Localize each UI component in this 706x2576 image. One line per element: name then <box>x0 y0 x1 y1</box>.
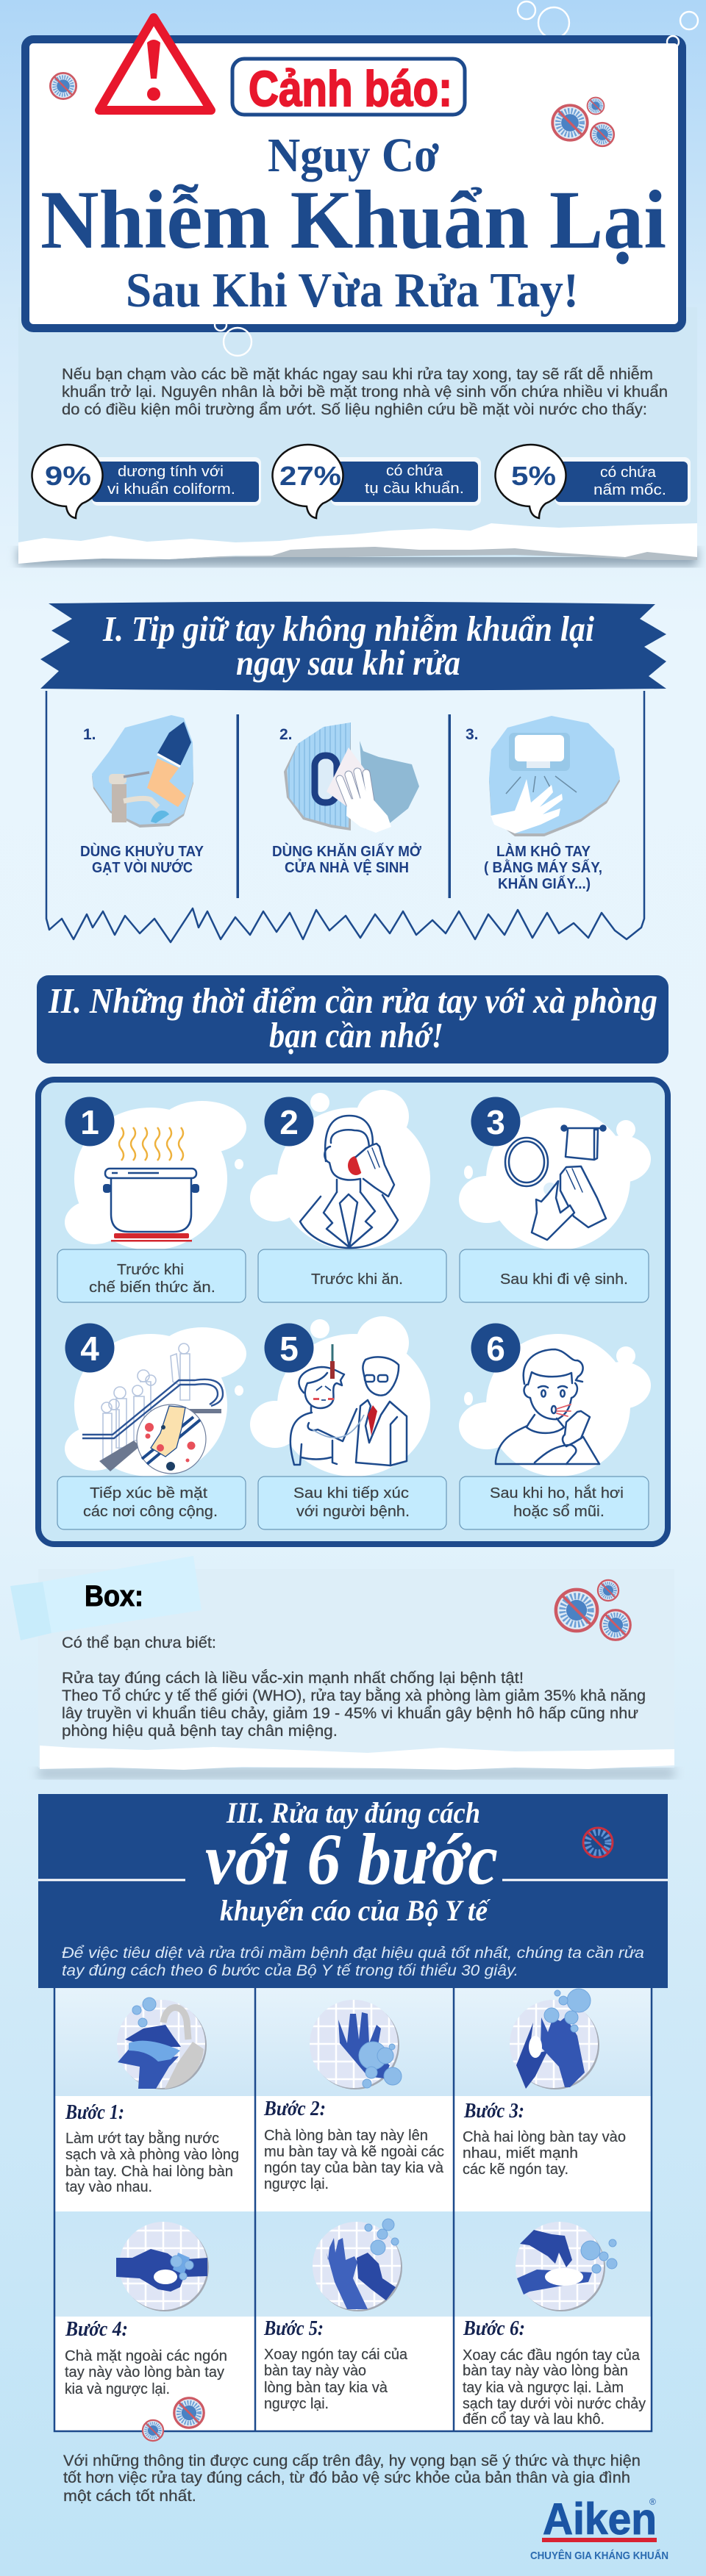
step 2 illustration <box>307 1997 402 2091</box>
stat: 5%: nấm mốc. <box>593 482 666 498</box>
number 3 <box>471 1097 521 1147</box>
step 2 text: ngược lại. <box>264 2176 329 2192</box>
caption box 2 <box>258 1249 446 1302</box>
caption box 6: Sau khi ho, hắt hơi <box>490 1485 624 1502</box>
moment 1: cloud <box>65 1101 246 1250</box>
tip 1: 1. <box>83 726 96 743</box>
intro text <box>62 366 668 418</box>
main title: Sau Khi Vừa Rửa Tay! <box>126 263 579 317</box>
step 2 text: mu bàn tay và kẽ ngoài các <box>264 2144 444 2160</box>
section II banner <box>37 975 668 1063</box>
step 5 text: Bước 5: <box>263 2317 324 2340</box>
moment 4: cloud <box>65 1327 246 1477</box>
section III header: III. Rửa tay đúng cách <box>226 1796 480 1829</box>
section II banner: bạn cần nhớ! <box>269 1015 443 1055</box>
step 5 <box>263 2219 408 2412</box>
step 6 text: Bước 6: <box>463 2317 525 2340</box>
virus icon left <box>50 73 76 99</box>
icon: escalator and germs <box>82 1343 223 1474</box>
tip 1 <box>80 715 204 876</box>
step 2 text: Bước 2: <box>263 2098 326 2120</box>
step 6 text: Xoay các đầu ngón tay của <box>463 2347 641 2364</box>
tip 2 <box>272 722 422 876</box>
step 6 text: đến cổ tay và lau khô. <box>463 2411 605 2428</box>
stat: 9%: 9% <box>45 461 91 491</box>
tape label: Box: <box>85 1580 143 1612</box>
caption 2: CỬA NHÀ VỆ SINH <box>285 858 409 876</box>
intro text: Nếu bạn chạm vào các bề mặt khác ngay sau khi rửa tay xong, tay sẽ rất dễ nhiễm <box>62 366 653 383</box>
virus cluster right <box>552 98 614 146</box>
warning triangle icon <box>99 18 211 110</box>
step 4 text: tay này vào lòng bàn tay <box>65 2364 224 2381</box>
stat: 5%: có chứa <box>600 464 657 481</box>
main title <box>40 129 666 317</box>
step 6 <box>463 2219 646 2428</box>
step 5 text: lòng bàn tay kia và <box>264 2380 388 2396</box>
step 6 text: bàn tay này vào lòng bàn <box>463 2363 628 2379</box>
stat: 9% <box>32 445 261 518</box>
moment 5: cloud <box>250 1316 430 1477</box>
step 3 <box>463 1989 626 2178</box>
caption 1 <box>80 842 204 876</box>
stat: 27% <box>273 445 481 518</box>
tip 2: 2. <box>279 726 293 743</box>
step 4 text: Chà mặt ngoài các ngón <box>65 2348 227 2364</box>
caption box 4 <box>57 1477 246 1529</box>
moment 3: cloud <box>459 1108 651 1250</box>
caption box 2: Trước khi ăn. <box>311 1271 403 1288</box>
caption box 3: Sau khi đi vệ sinh. <box>500 1271 628 1288</box>
caption box 5: với người bệnh. <box>296 1504 410 1520</box>
number 5: 5 <box>279 1330 299 1368</box>
closing text: Với những thông tin được cung cấp trên đây, hy vọng bạn sẽ ý thức và thực hiện <box>63 2453 641 2469</box>
torn paper edge <box>18 523 697 564</box>
section I heading: ngay sau khi rửa <box>236 642 460 683</box>
caption box 5 <box>258 1477 446 1529</box>
virus cluster box <box>556 1580 630 1640</box>
caption 3: ( BẰNG MÁY SẤY, <box>484 858 602 876</box>
tip divider 2 <box>449 714 451 898</box>
box text: lây truyền vi khuẩn tiêu chảy, giảm 19 - 45% vi khuẩn gây bệnh hô hấp cũng như <box>62 1705 638 1722</box>
step 5 text: ngược lại. <box>264 2396 329 2412</box>
step 5 text: Xoay ngón tay cái của <box>264 2347 408 2363</box>
caption 2: DÙNG KHĂN GIẤY MỞ <box>272 842 422 860</box>
intro text: khuẩn trở lại. Nguyên nhân là bởi bề mặt trong nhà vệ sinh vốn chứa nhiều vi khuẩn <box>62 384 668 401</box>
step 4 text <box>65 2318 227 2397</box>
tip 3: 3. <box>466 726 479 743</box>
box text: phòng hiệu quả bệnh tay chân miệng. <box>62 1723 338 1740</box>
intro text: do có điều kiện môi trường ẩm ướt. Số liệu nghiên cứu bề mặt vòi nước cho thấy: <box>62 401 647 418</box>
icon: elbow on faucet <box>92 715 193 828</box>
step 4 text: Bước 4: <box>65 2318 128 2341</box>
warning pill: Cảnh báo: <box>249 61 452 117</box>
number 5 <box>265 1323 313 1373</box>
step 6 text: tay kia và ngược lại. Làm <box>463 2380 624 2396</box>
caption 3: LÀM KHÔ TAY <box>496 842 591 860</box>
main title: Nhiễm Khuẩn Lại <box>40 174 666 266</box>
box text: Có thể bạn chưa biết: <box>62 1635 216 1651</box>
stat: 9%: dương tính với <box>118 464 224 480</box>
number 3: 3 <box>486 1103 505 1141</box>
section III description: Để việc tiêu diệt và rửa trôi mầm bệnh đạt hiệu quả tốt nhất, chúng ta cần rửa <box>62 1945 644 1962</box>
stat: 27%: tụ cầu khuẩn. <box>365 481 464 497</box>
step 5 illustration <box>310 2219 404 2313</box>
icon: hand dryer <box>489 716 620 836</box>
closing text: một cách tốt nhất. <box>63 2488 196 2505</box>
caption box 3 <box>460 1249 649 1302</box>
section II panel <box>38 1080 668 1544</box>
icon: cooking pot <box>103 1127 199 1242</box>
step 3 illustration <box>507 1989 601 2091</box>
icon: doctor and patient <box>290 1344 407 1465</box>
number 1 <box>65 1097 115 1147</box>
step 6 text: sạch tay dưới vòi nước chảy <box>463 2396 646 2412</box>
caption box 1: chế biến thức ăn. <box>89 1280 215 1296</box>
box text: Rửa tay đúng cách là liều vắc-xin mạnh nhất chống lại bệnh tật! <box>62 1670 524 1687</box>
caption 1: GẠT VÒI NƯỚC <box>92 858 193 876</box>
step 1 illustration <box>114 1997 208 2091</box>
stat: 27%: 27% <box>279 461 341 491</box>
Aiken logo <box>530 2494 668 2562</box>
tape label <box>10 1556 202 1640</box>
section III grid backgrounds <box>54 1988 652 2431</box>
step 4 <box>65 2219 227 2441</box>
number 4 <box>65 1323 115 1373</box>
virus pair step 4 <box>143 2398 204 2441</box>
step 3 text: Bước 3: <box>463 2100 524 2123</box>
step 2 text <box>263 2098 444 2192</box>
number 2 <box>265 1097 313 1147</box>
decorative soap bubbles top <box>518 1 698 38</box>
caption box 1 <box>57 1249 246 1302</box>
caption box 4: Tiếp xúc bề mặt <box>90 1485 207 1502</box>
step 4 text: kia và ngược lại. <box>65 2381 170 2397</box>
section I heading <box>102 609 594 683</box>
moment 6: cloud <box>459 1334 651 1477</box>
step 1 text: bàn tay. Chà hai lòng bàn <box>65 2164 233 2180</box>
number 1: 1 <box>80 1103 99 1141</box>
caption box 1: Trước khi <box>117 1262 184 1278</box>
title frame <box>25 18 682 328</box>
step 1 text: Bước 1: <box>65 2101 124 2124</box>
step 1 text: Làm ướt tay bằng nước <box>65 2130 219 2147</box>
caption 3: KHĂN GIẤY...) <box>498 875 591 892</box>
stat: 9%: vi khuẩn coliform. <box>107 481 235 498</box>
number 4: 4 <box>80 1330 99 1368</box>
step 2 <box>263 1997 444 2192</box>
main title: Nguy Cơ <box>268 129 439 182</box>
step 3 text: nhau, miết mạnh <box>463 2145 578 2161</box>
step 3 text: các kẽ ngón tay. <box>463 2161 568 2178</box>
box panel <box>10 1556 674 1779</box>
closing text: tốt hơn việc rửa tay đúng cách, từ đó bảo vệ sức khỏe của bản thân và gia đình <box>63 2469 630 2486</box>
caption 1: DÙNG KHUỶU TAY <box>80 842 204 860</box>
tip divider 1 <box>237 714 239 898</box>
section III header <box>38 1794 668 1988</box>
section I frame with zigzag <box>46 691 644 942</box>
number 6: 6 <box>486 1330 505 1368</box>
section I banner <box>40 602 666 691</box>
caption box 6: hoặc sổ mũi. <box>513 1504 605 1520</box>
box text: Theo Tổ chức y tế thế giới (WHO), rửa tay bằng xà phòng làm giảm 35% khả năng <box>62 1687 646 1704</box>
section III header: với 6 bước <box>205 1818 498 1900</box>
stat: 5% <box>496 445 691 518</box>
step 1 text: sạch và xà phòng vào lòng <box>65 2147 239 2163</box>
icon: towel and washing hands <box>505 1126 606 1240</box>
step 1 text <box>65 2101 239 2195</box>
closing text <box>63 2453 641 2505</box>
section I <box>40 602 666 942</box>
icon: man eating <box>300 1116 398 1248</box>
Aiken logo: Aiken <box>543 2494 657 2544</box>
number 2: 2 <box>279 1103 299 1141</box>
step 5 text: bàn tay này vào <box>264 2363 366 2379</box>
Aiken logo: CHUYÊN GIA KHÁNG KHUẨN <box>530 2549 668 2562</box>
stat: 27%: có chứa <box>386 463 443 479</box>
step 1 <box>65 1997 239 2195</box>
section III header: khuyến cáo của Bộ Y tế <box>220 1894 491 1927</box>
step 3 text <box>463 2100 626 2178</box>
icon: coughing boy <box>496 1349 599 1464</box>
caption 3 <box>484 842 602 892</box>
virus icon header <box>583 1828 613 1857</box>
step 6 text <box>463 2317 646 2428</box>
stat: 5%: 5% <box>511 461 556 491</box>
section I heading: I. Tip giữ tay không nhiễm khuẩn lại <box>102 609 594 649</box>
caption box 4: các nơi công cộng. <box>83 1504 218 1520</box>
step 2 text: ngón tay của bàn tay kia và <box>264 2160 444 2176</box>
step 6 illustration <box>513 2219 617 2313</box>
section III description <box>62 1945 644 1979</box>
step 3 text: Chà hai lòng bàn tay vào <box>463 2129 626 2145</box>
caption box 6 <box>460 1477 649 1529</box>
moment 2: cloud <box>250 1090 430 1250</box>
step 2 text: Chà lòng bàn tay này lên <box>264 2128 428 2144</box>
section III description: tay đúng cách theo 6 bước của Bộ Y tế trong tối thiểu 30 giây. <box>62 1962 518 1979</box>
box text <box>62 1635 646 1740</box>
number 6 <box>471 1323 521 1373</box>
step 1 text: tay vào nhau. <box>65 2179 152 2195</box>
icon: tissue on door handle <box>284 722 419 833</box>
Aiken logo: ® <box>649 2497 656 2507</box>
decorative soap bubbles middle <box>215 36 679 356</box>
step 4 illustration <box>116 2219 210 2313</box>
tip 3 <box>466 716 620 892</box>
intro paper panel <box>18 307 697 566</box>
step 5 text <box>263 2317 408 2412</box>
caption 2 <box>272 842 422 876</box>
caption box 5: Sau khi tiếp xúc <box>293 1485 409 1502</box>
